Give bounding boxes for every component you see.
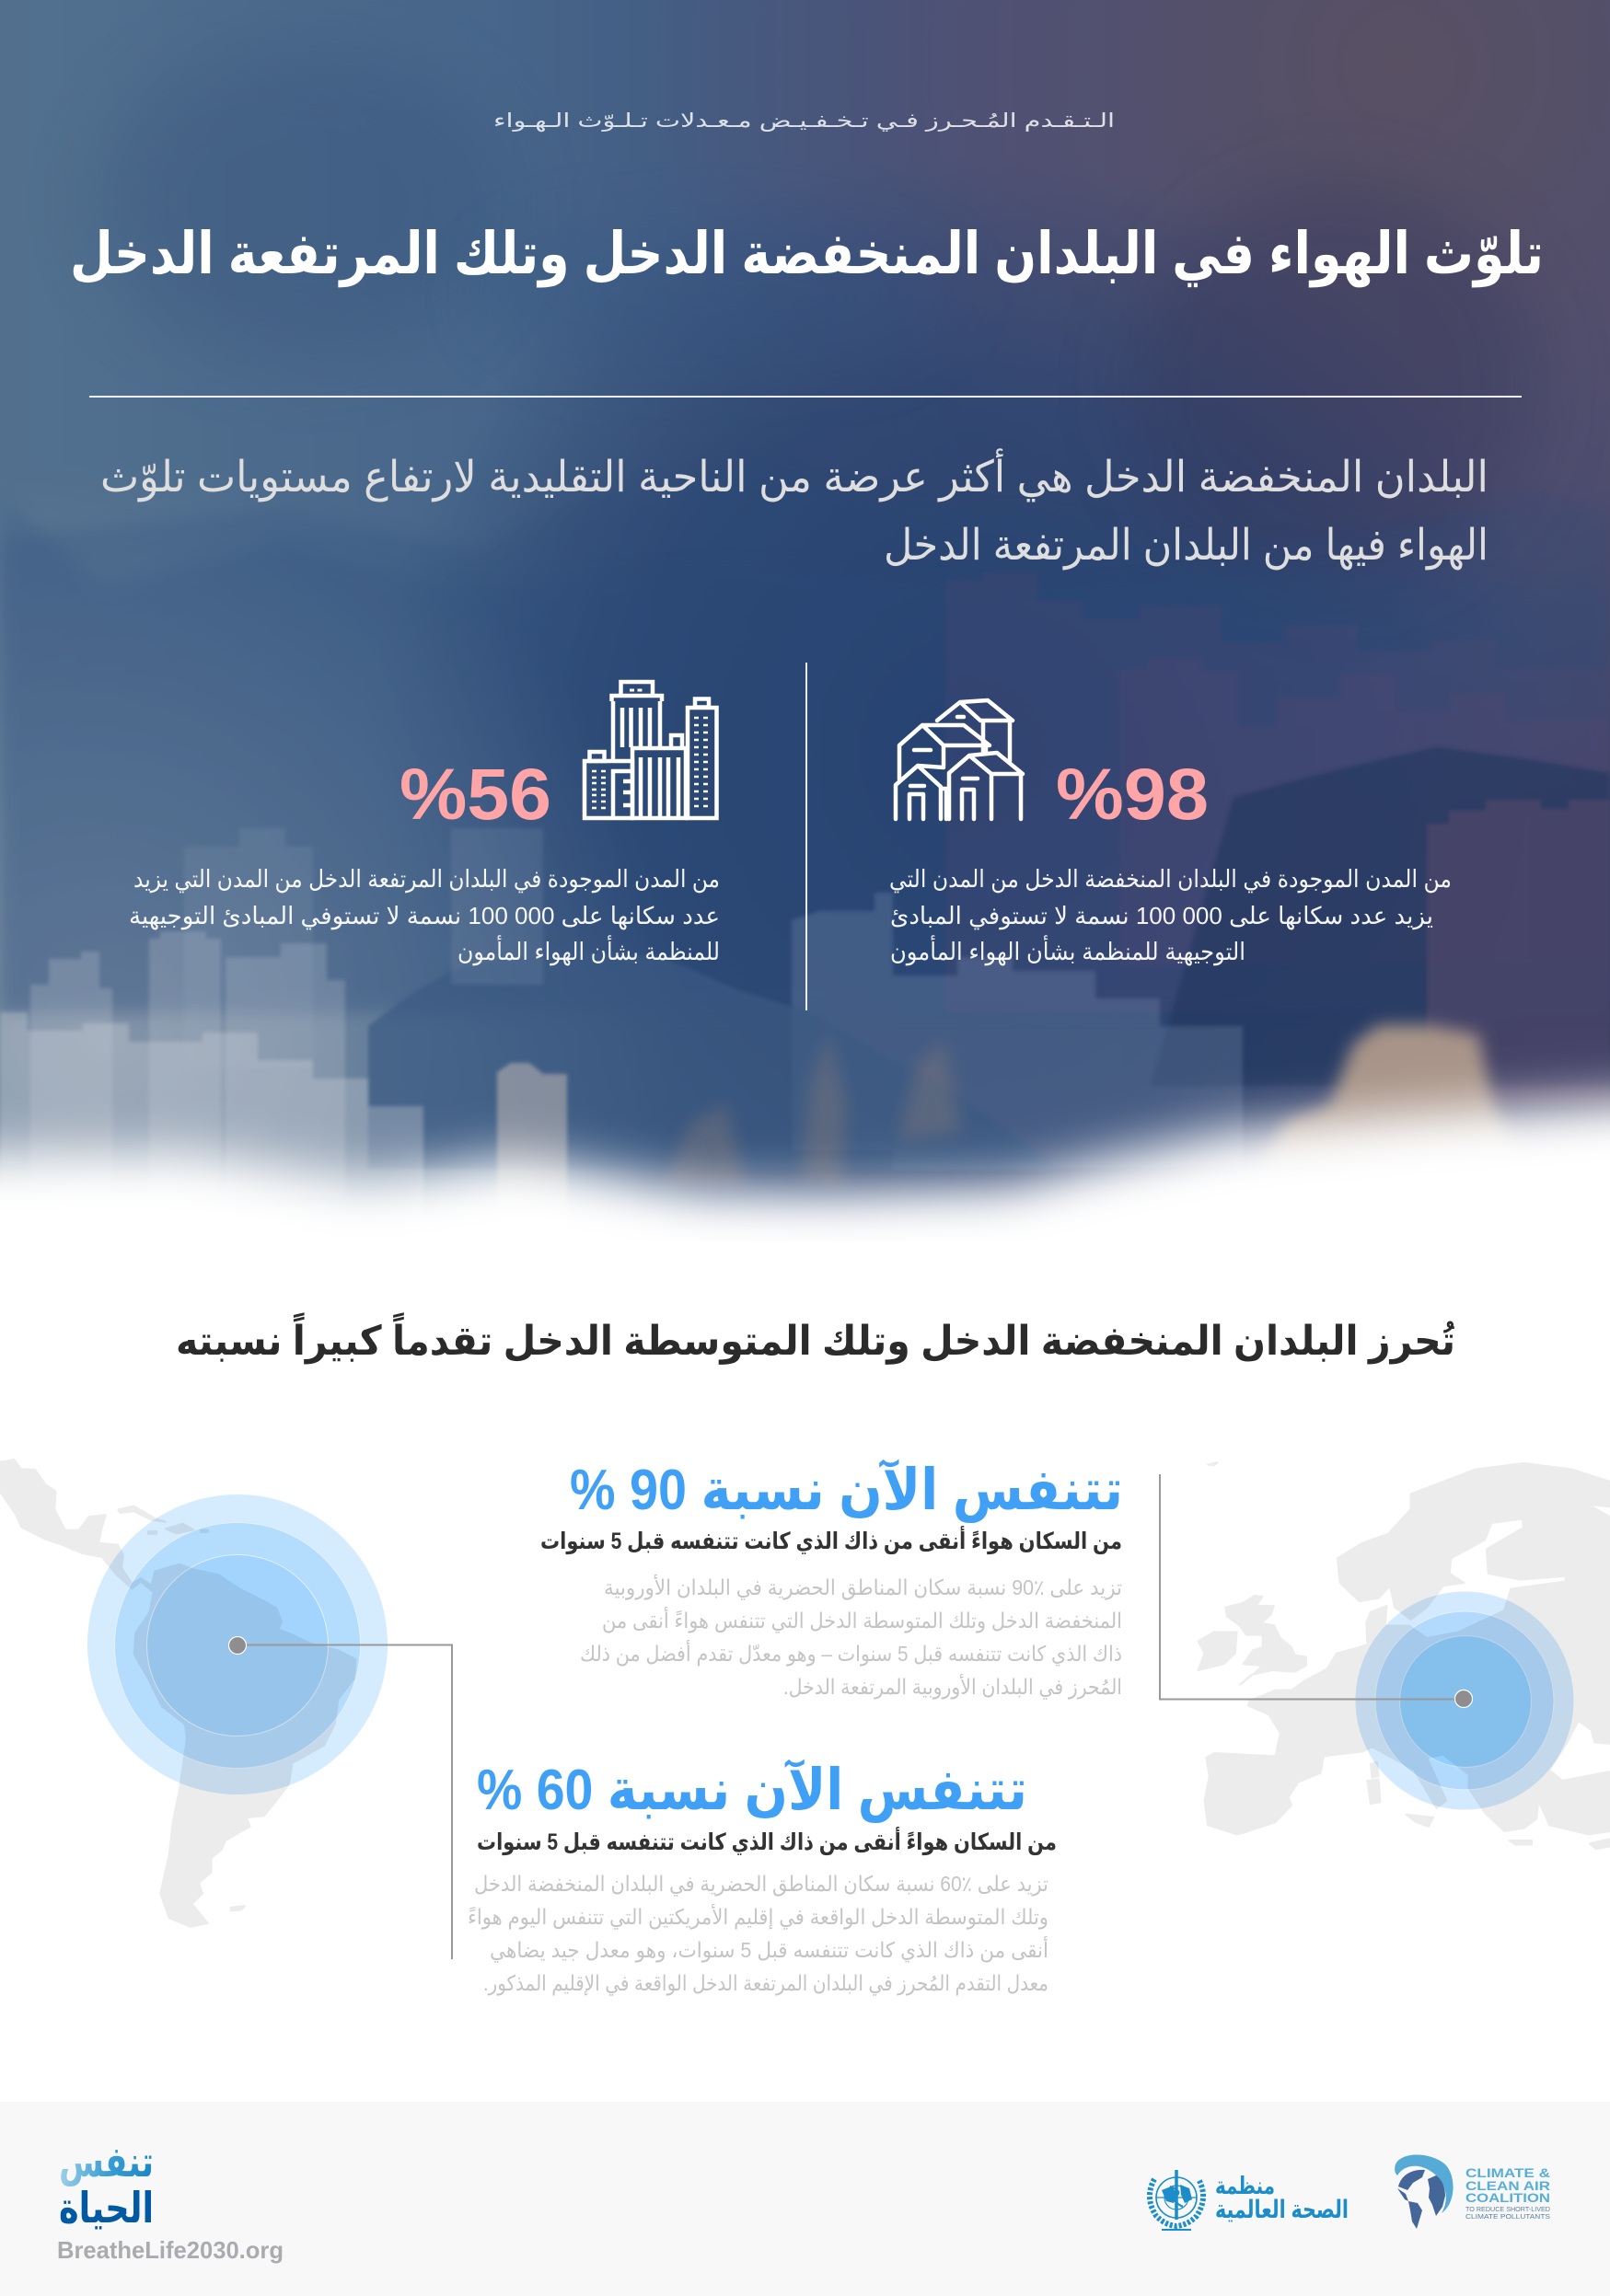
callout body: تزيد على ٪90 نسبة سكان المناطق الحضرية في البلدان الأوروبية (604, 1575, 1122, 1600)
callout body: معدل التقدم المُحرز في البلدان المرتفعة الدخل الواقعة في الإقليم المذكور. (483, 1971, 1048, 1996)
divider under title (89, 396, 1522, 398)
text: high-income cities description: للمنظمة بشأن الهواء المأمون (458, 934, 720, 966)
intro statement: البلدان المنخفضة الدخل هي أكثر عرضة من الناحية التقليدية لارتفاع مستويات تلوّث (100, 448, 1488, 502)
callout body: وتلك المتوسطة الدخل الواقعة في إقليم الأمريكتين التي تتنفس اليوم هواءً (468, 1904, 1048, 1930)
callout heading: تتنفس الآن نسبة 60 % (477, 1759, 1027, 1823)
text: low-income cities description: يزيد عدد سكانها على 000 100 نسمة لا تستوفي المبادئ (890, 902, 1433, 930)
text: high-income cities description: من المدن الموجودة في البلدان المرتفعة الدخل من المدن التي يزيد (133, 865, 720, 894)
section heading: تُحرز البلدان المنخفضة الدخل وتلك المتوسطة الدخل تقدماً كبيراً نسبته (176, 1311, 1455, 1365)
callout body: ذاك الذي كانت تتنفسه قبل 5 سنوات – وهو معدّل تقدم أفضل من ذلك (580, 1640, 1122, 1667)
callout body: المنخفضة الدخل وتلك المتوسطة الدخل التي تتنفس هواءً أنقى من (602, 1607, 1122, 1633)
callout subheading: من السكان هواءً أنقى من ذاك الذي كانت تتنفسه قبل 5 سنوات (540, 1526, 1122, 1555)
callout subheading: من السكان هواءً أنقى من ذاك الذي كانت تتنفسه قبل 5 سنوات (477, 1827, 1057, 1856)
callout body (468, 1872, 1048, 1996)
logo: Climate and Clean Air Coalition: COALITION (1465, 2190, 1550, 2205)
logo: BreatheLife: BreatheLife2030.org (57, 2236, 284, 2264)
logo: Climate and Clean Air Coalition: CLIMATE POLLUTANTS (1465, 2214, 1550, 2221)
logo: Climate and Clean Air Coalition: CLIMATE & (1465, 2165, 1550, 2180)
callout body: المُحرز في البلدان الأوروبية المرتفعة الدخل. (783, 1674, 1122, 1700)
logo: World Health Organization (1150, 2170, 1349, 2230)
logo: BreatheLife: تنفس (59, 2138, 154, 2186)
eyebrow title: الـتـقـدم المُـحـرز فـي تـخـفـيـض مـعـدلات تـلـوّث الـهـواء (493, 110, 1115, 132)
logo: Climate and Clean Air Coalition: CLEAN AIR (1465, 2178, 1550, 2193)
callout heading: تتنفس الآن نسبة 90 % (570, 1459, 1123, 1523)
text: low-income cities description: من المدن الموجودة في البلدان المنخفضة الدخل من المدن التي (889, 865, 1452, 894)
callout: 60 percent Americas (468, 1759, 1057, 1996)
map: Latin America with concentric circles (0, 1460, 452, 1959)
text: low-income cities description: التوجيهية للمنظمة بشأن الهواء المأمون (890, 934, 1245, 966)
text: high-income cities description: عدد سكانها على 000 100 نسمة لا تستوفي المبادئ التوجيهية (129, 902, 720, 930)
logo: BreatheLife: الحياة (59, 2184, 154, 2232)
text: high-income cities description (129, 865, 720, 966)
callout body (580, 1575, 1122, 1700)
statistic: 56 percent: %56 (400, 753, 551, 835)
callout body: أنقى من ذاك الذي كانت تتنفسه قبل 5 سنوات، وهو معدل جيد يضاهي (490, 1936, 1048, 1963)
logo: Climate and Clean Air Coalition (1395, 2155, 1550, 2229)
background photo: hazy city skyline (0, 0, 1610, 1231)
map: Europe with concentric circles (1160, 1462, 1610, 1849)
statistic: 98 percent: %98 (1056, 753, 1209, 835)
intro statement (100, 448, 1488, 571)
intro statement: الهواء فيها من البلدان المرتفعة الدخل (884, 520, 1488, 571)
logo: BreatheLife (57, 2138, 284, 2264)
logo: World Health Organization: منظمة (1215, 2172, 1275, 2199)
callout: 90 percent Europe (540, 1459, 1123, 1700)
logo: Climate and Clean Air Coalition: TO REDUCE SHORT-LIVED (1465, 2207, 1550, 2213)
callout body: تزيد على ٪60 نسبة سكان المناطق الحضرية في البلدان المنخفضة الدخل (474, 1872, 1048, 1897)
warm lit cloud (1261, 1025, 1519, 1169)
text: low-income cities description (889, 865, 1452, 966)
icon: houses (896, 700, 1023, 819)
footer band (0, 2102, 1610, 2296)
logo: World Health Organization: الصحة العالمية (1215, 2196, 1349, 2223)
vertical divider between statistics (805, 663, 807, 1010)
icon: high-rise buildings (585, 682, 716, 818)
